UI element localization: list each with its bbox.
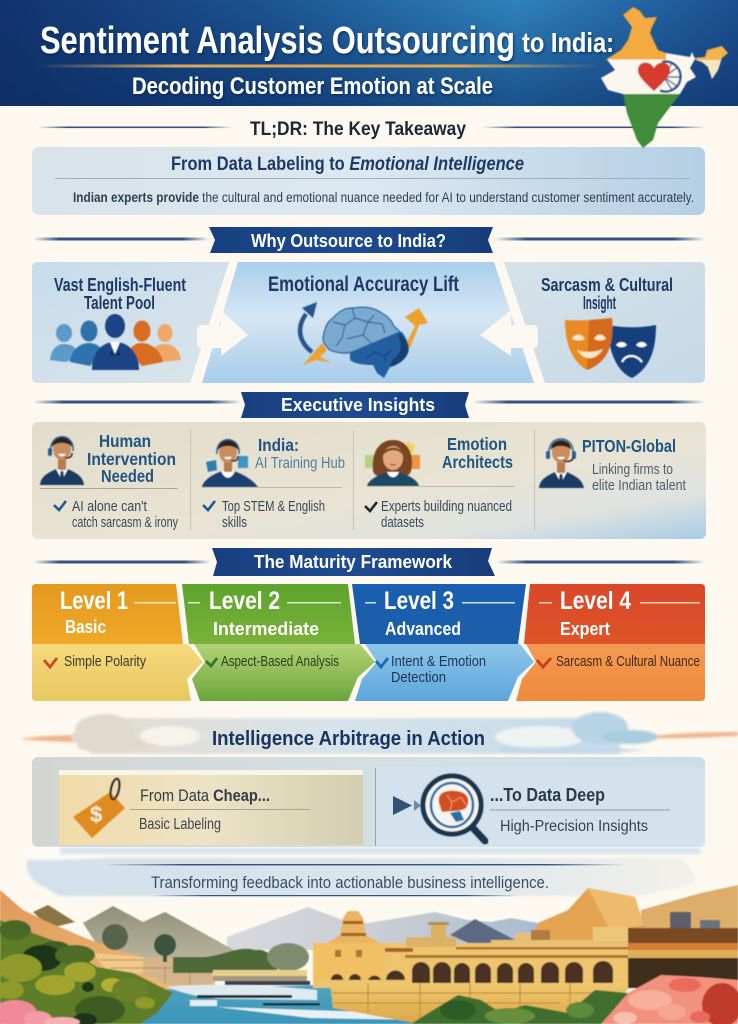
icon: agent portrait [40,437,84,485]
level 3: advanced: Advanced [385,618,461,639]
left hillside [0,890,215,1024]
check mark [365,502,377,511]
insight text: catch sarcasm & irony [72,515,179,531]
insight text: datasets [381,515,424,531]
icon: woman portrait [365,440,420,486]
section heading: TL;DR: TL;DR: The Key Takeaway [250,119,466,140]
palace: temple spire [313,911,385,980]
cloud band behind closing line [27,847,700,896]
check mark [44,658,57,667]
insight: PITON-Global [539,436,687,494]
palace: arches [331,961,613,985]
sarcasm heading [541,275,673,313]
level 4: expert: Sarcasm & Cultural Nuance [556,654,700,670]
heading: Intelligence Arbitrage in Action: Intelligence Arbitrage in Action [212,727,485,750]
title: to India: [522,27,614,58]
insight heading [87,431,176,486]
icon: agent portrait [539,439,584,488]
icon: agent portrait with screens [202,440,258,487]
text: high-precision insights: High-Precision Insights [500,818,648,835]
wall on hillside [93,953,212,985]
text: to data deep: ...To Data Deep [490,785,605,805]
level 3: advanced: Intent & Emotion [391,654,486,670]
insight text [222,499,325,531]
header banner [0,0,738,106]
check mark [537,658,551,667]
maturity framework [32,584,705,701]
section heading: Why Outsource to India?: Why Outsource to India? [251,231,446,251]
panel: sarcasm and cultural insight [504,262,705,383]
level 3: advanced [352,584,534,701]
icon: comedy and tragedy masks [565,318,656,378]
icon: price tag [73,778,125,838]
check mark [203,501,215,510]
talent pool heading [54,275,186,313]
check mark [206,658,217,666]
check mark [54,501,66,510]
level 1: basic: Basic [65,616,106,637]
palace: base wall [330,983,628,1024]
panel: emotional accuracy lift [202,262,534,383]
from data cheap [59,770,363,845]
insight text [381,499,512,531]
insight: human intervention [40,431,179,531]
insight text: elite Indian talent [592,477,687,494]
section heading: Executive Insights: Executive Insights [281,395,435,415]
insight text [592,461,687,494]
bush bottom center [411,990,628,1024]
insight: AI training hub [202,435,345,531]
icon: India map with heart and wheel [601,7,728,148]
sarcasm heading: Insight [583,293,616,313]
insight heading: PITON-Global [582,436,676,456]
panel: intelligence arbitrage [32,757,705,847]
insight heading: AI Training Hub [255,455,345,472]
insight heading: Needed [101,466,154,486]
section heading: Executive Insights [33,392,705,418]
panel: executive insights [32,422,706,539]
right rock and hills [530,885,738,942]
arrow: left into center [197,310,248,356]
insight text: skills [222,515,247,531]
panel: talent pool [32,262,229,383]
palace: terrace and right block [313,922,738,988]
level 2: intermediate [182,584,375,701]
insight heading [255,435,345,472]
arrow: right into center [480,310,538,356]
flowers right [601,975,738,1024]
far mountains [33,905,560,965]
subtitle: Decoding Customer Emotion at Scale [132,73,493,100]
level 2: intermediate: Level 2 [209,587,280,615]
insight text: Top STEM & English [222,499,325,515]
cloud band behind arbitrage heading [19,712,738,754]
level 4: expert: Expert [560,618,610,639]
icon: magnifier with brain [423,776,485,841]
section heading: Why Outsource to India? [33,227,705,253]
heart [638,62,670,91]
level 3: advanced: Level 3 [384,587,454,615]
icon: brain with arrows [300,302,428,378]
section heading: The Maturity Framework [33,548,705,576]
accuracy lift heading: Emotional Accuracy Lift [268,273,459,296]
illustration: Indian landscape with palace and river [0,885,738,1024]
takeaway heading: From Data Labeling to Emotional Intelligence [171,154,524,175]
talent pool heading: Talent Pool [84,293,155,313]
insight: emotion architects [365,434,515,531]
title: Sentiment Analysis Outsourcing [40,20,515,62]
river and bridge [140,970,420,1024]
icon: play arrows [393,796,421,815]
insight text: Linking firms to [592,461,673,478]
level 4: expert [516,584,705,701]
level 2: intermediate: Aspect-Based Analysis [221,654,339,670]
pink flowers left [0,1000,80,1024]
icon: price tag: $ [90,802,102,827]
level 1: basic [32,584,203,701]
insight text [72,499,179,531]
closing statement: Transforming feedback into actionable business intelligence. [151,873,549,892]
insight heading: Architects [442,452,513,472]
distant trees [102,924,309,973]
insight heading [442,434,513,472]
sarcasm heading: Sarcasm & Cultural [541,275,673,295]
panel: TL;DR takeaway [32,147,705,215]
insight text: Experts building nuanced [381,499,512,515]
insight heading: Intervention [87,449,176,469]
insight heading: Human [99,431,151,451]
wall courses [332,983,600,1018]
section heading: The Maturity Framework: The Maturity Framework [254,552,453,572]
level 4: expert: Level 4 [560,587,631,615]
level 3: advanced: Detection [391,670,446,686]
wheel [660,62,682,92]
level 1: basic: Level 1 [60,587,128,615]
title underline [35,64,600,68]
talent pool heading: Vast English-Fluent [54,275,186,295]
check mark [376,658,388,667]
insight heading: Emotion [447,434,507,454]
text: from data cheap: From Data Cheap... [140,786,270,805]
icon: people group [50,314,181,370]
level 2: intermediate: Intermediate [213,618,319,639]
level 1: basic: Simple Polarity [64,654,147,670]
text: basic labeling: Basic Labeling [139,816,221,833]
insight text: AI alone can't [72,499,147,515]
foreground trees left [0,920,173,1024]
insight heading: India: [258,435,299,455]
